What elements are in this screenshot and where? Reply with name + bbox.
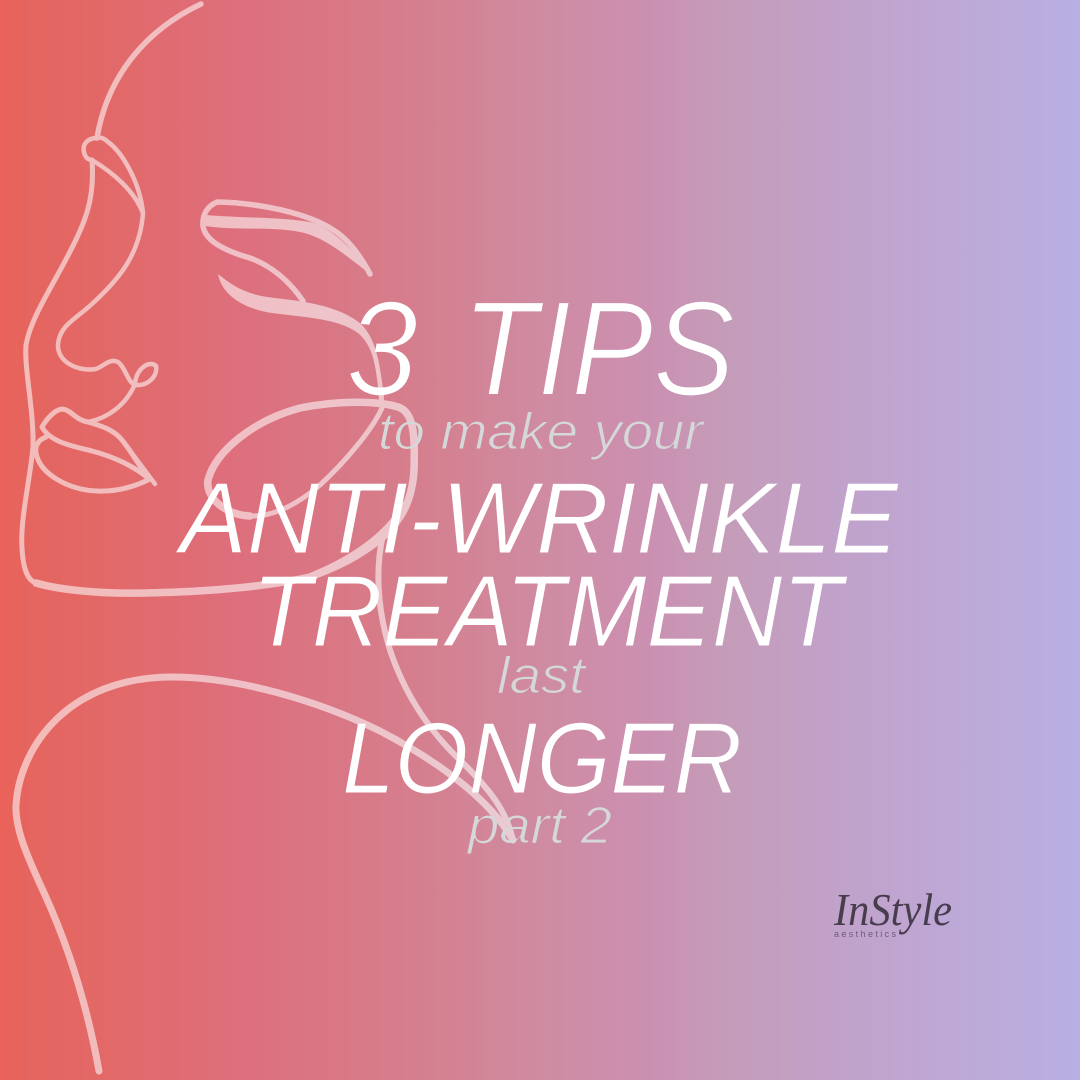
subheading: part 2: part 2 [466,797,612,855]
logo: InStyle aesthetics [833,884,952,939]
nose bridge and cheek line [22,160,93,583]
heading: TREATMENT: TREATMENT [252,556,848,668]
lower lip [36,437,150,491]
jaw line [36,505,405,593]
forehead line [97,4,201,138]
heading: 3 TIPS [346,273,735,424]
heading: 3 TIPS: TIPS [462,273,735,424]
neck front [378,535,513,840]
subheading: to make your: to make your [378,403,706,461]
eyebrow thick band [205,215,370,274]
heading: 3 TIPS: 3 [346,273,418,424]
eyebrow outline [203,202,370,301]
eye [84,138,143,213]
eye socket ring [208,402,414,575]
eye socket lower line [250,392,382,516]
logo wordmark: InStyle [833,884,952,935]
subheading: last: last [497,647,588,705]
line art: female face profile [16,4,513,1071]
upper lip [42,409,148,478]
lip corner [122,440,155,484]
logo tagline: aesthetics [834,929,896,939]
eyelid [218,274,384,398]
shoulder and neck [16,677,513,1071]
nose and nostril to lip [58,213,156,422]
title text block [175,273,900,855]
heading: ANTI-WRINKLE: ANTI-WRINKLE [175,463,900,575]
heading: LONGER: LONGER [342,703,742,815]
